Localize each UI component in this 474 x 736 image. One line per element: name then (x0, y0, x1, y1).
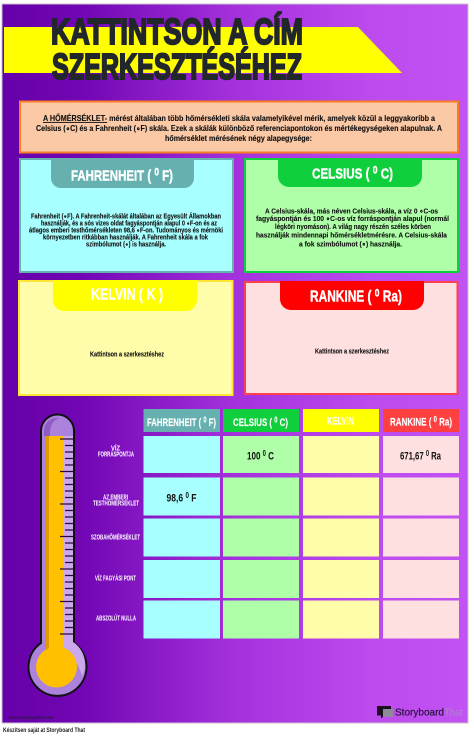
logo: Storyboard That: That (444, 706, 463, 718)
title banner (4, 27, 402, 73)
thermometer (29, 414, 87, 696)
Fahrenheit tab (51, 158, 194, 188)
Rankine heading: 0 (375, 288, 380, 300)
Kelvin text: Kattintson a szerkesztéshez (90, 350, 164, 358)
Celsius text: A Celsius-skála, más néven Celsius-skála, a víz 0 ∘C-os (265, 206, 438, 216)
Fahrenheit text (29, 212, 223, 248)
Rankine heading: Ra) (380, 288, 402, 306)
panel: Rankine (245, 281, 458, 394)
table cells: Kelvin column (303, 436, 379, 638)
small url: www.storyboardthat.com (8, 715, 53, 720)
table cells: Fahrenheit column (144, 436, 220, 638)
table values: C (266, 450, 274, 462)
table header: KELVIN (327, 416, 354, 428)
intro panel (20, 102, 458, 152)
title: SZERKESZTÉSÉHEZ (52, 46, 302, 87)
table values: 0 (263, 449, 266, 458)
table values: 671,67 (400, 450, 434, 462)
Celsius tab (278, 158, 422, 187)
table (144, 409, 459, 638)
footer credit: Készítsen saját at Storyboard That (3, 728, 85, 734)
table values: 0 (426, 449, 429, 458)
Fahrenheit heading: 0 (154, 166, 159, 178)
table values: F (189, 492, 197, 504)
table values: 0 (185, 491, 189, 500)
table values (166, 449, 442, 504)
row labels: AZ EMBERI (103, 492, 128, 502)
Celsius text (256, 206, 449, 248)
panel: Celsius (245, 158, 458, 272)
title (51, 11, 303, 87)
Kelvin heading: KELVIN ( K ) (91, 286, 163, 304)
intro text: A HŐMÉRSÉKLET- mérést általában több hőmérsékleti skála valamelyikével mérik, amelyek közül a leggyakoribb a (43, 112, 435, 123)
table values: 100 (247, 450, 265, 462)
row labels (91, 444, 140, 622)
table cells: Rankine column (383, 436, 459, 638)
Celsius text: fagyáspontján és 100 ∘C-os víz forráspontján alapul (normál (256, 214, 449, 223)
table header: Ra) (437, 416, 452, 428)
Rankine tab (280, 281, 424, 310)
Celsius text: használják mindennapi hőmérsékletmérésre. A Celsius-skála (256, 230, 448, 240)
panel: Fahrenheit (20, 158, 233, 272)
Celsius heading: CELSIUS ( (312, 166, 386, 182)
table header: RANKINE ( (390, 416, 447, 428)
table header: 0 (203, 416, 207, 424)
Fahrenheit text: Fahrenheit (∘F). A Fahrenheit-skálát általában az Egyesült Államokban (31, 212, 221, 220)
Fahrenheit text: környezetben ritkábban használják. A Fahrenheit skála a fok (43, 232, 208, 242)
Kelvin tab (53, 280, 197, 311)
intro text: hőmérséklet mérésének négy alapegysége: (165, 133, 312, 143)
Fahrenheit heading: FAHRENHEIT ( (71, 168, 176, 184)
table header: 0 (274, 416, 278, 424)
Celsius text: a fok szimbólumot (∘) használja. (299, 240, 402, 248)
Celsius heading: 0 (373, 164, 377, 176)
panel: Kelvin (19, 280, 232, 395)
table header: CELSIUS ( (233, 417, 287, 429)
table header (144, 409, 459, 432)
row labels: SZOBAHŐMÉRSÉKLET (91, 532, 140, 542)
logo: Storyboard That (377, 706, 463, 718)
Celsius text: légköri nyomáson). A világ nagy részén széles körben (275, 222, 431, 231)
Fahrenheit text: átlagos emberi testhőmérsékleten 98,6 ∘F-on. Tudományos és mérnöki (29, 226, 223, 234)
table header: C) (277, 417, 288, 429)
table header: 0 (434, 415, 437, 424)
table values: 98,6 (166, 492, 188, 504)
Fahrenheit text: szimbólumot (∘) is használja. (86, 240, 166, 248)
row labels: VÍZ (111, 444, 120, 452)
row labels: TESTHŐMÉRSÉKLET (93, 498, 139, 508)
row labels: VÍZ FAGYÁSI PONT (95, 574, 136, 582)
row labels: ABSZOLÚT NULLA (96, 614, 136, 622)
Rankine heading: RANKINE ( (310, 288, 390, 306)
table header: FAHRENHEIT ( (147, 417, 224, 429)
Celsius heading: C) (377, 166, 393, 182)
Fahrenheit heading: F) (159, 168, 173, 184)
table cells: Celsius column (223, 436, 299, 638)
row labels: FORRÁSPONTJA (98, 450, 134, 458)
intro text (36, 112, 442, 143)
table values: Ra (429, 450, 442, 462)
logo: Storyboard That: Storyboard (395, 706, 444, 718)
Rankine text: Kattintson a szerkesztéshez (315, 346, 389, 356)
Fahrenheit text: használják, és a sós vizes oldat fagyáspontján alapul 0 ∘F-on és az (41, 218, 217, 228)
table header: F) (207, 417, 216, 429)
title: KATTINTSON A CÍM (51, 11, 303, 52)
